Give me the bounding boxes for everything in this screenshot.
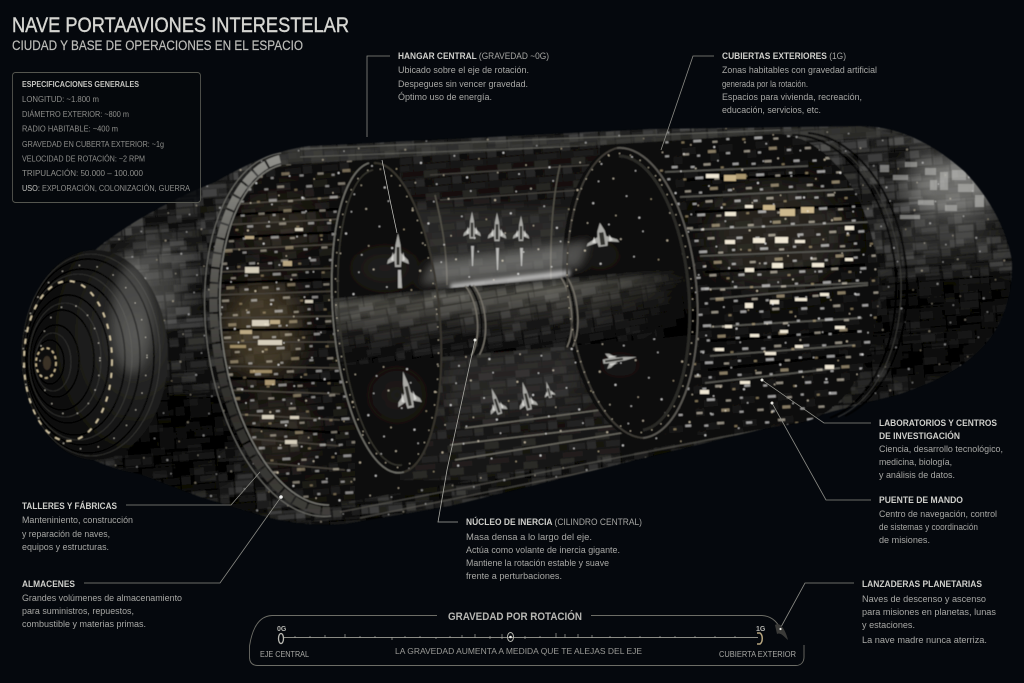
callout: talleres y fabricas: TALLERES Y FÁBRICAS (22, 501, 117, 511)
callout: laboratorios: medicina, biología, (879, 457, 952, 467)
right habitat decks (659, 134, 880, 435)
axis labels: EJE CENTRAL (260, 650, 309, 659)
callout: puente de mando: Centro de navegación, control (879, 509, 997, 519)
callout: hangar central: HANGAR CENTRAL (GRAVEDAD ~0G) (398, 51, 549, 61)
nose hub lights (36, 348, 56, 378)
callout: nucleo de inercia: NÚCLEO DE INERCIA (CILINDRO CENTRAL) (466, 516, 642, 527)
callout: almacenes: ALMACENES (22, 579, 75, 589)
callout: almacenes (22, 495, 283, 629)
callout: hangar central: Óptimo uso de energía. (398, 92, 492, 102)
1G marker (756, 626, 766, 644)
callout: talleres y fabricas (22, 472, 260, 552)
rear end cap rings (792, 133, 907, 418)
lit plates on the rear cap (880, 162, 984, 219)
specifications list: DIÁMETRO EXTERIOR: ~800 m (22, 109, 129, 119)
axis labels (260, 646, 796, 659)
left ring band (213, 159, 330, 511)
specifications list: USO: EXPLORACIÓN, COLONIZACIÓN, GUERRA (22, 183, 190, 193)
panel: general specifications (12, 72, 200, 202)
callout: cubiertas exteriores (661, 51, 877, 150)
callout: talleres y fabricas: equipos y estructuras. (22, 542, 109, 552)
subtitle: CIUDAD Y BASE DE OPERACIONES EN EL ESPACIO (12, 38, 303, 53)
callout: lanzaderas planetarias: Naves de descenso y ascenso (862, 594, 986, 604)
bulkhead ellipse two (562, 148, 698, 438)
callout: nucleo de inercia: frente a perturbaciones. (466, 571, 562, 581)
callout: laboratorios: y análisis de datos. (879, 470, 955, 480)
callout: puente de mando (770, 402, 997, 545)
panel: gravity by rotation (250, 610, 804, 666)
callout: puente de mando: de misiones. (879, 535, 930, 545)
gravity scale line (283, 632, 758, 642)
1G marker: 1G (756, 626, 766, 633)
callout: laboratorios: LABORATORIOS Y CENTROS (879, 418, 997, 428)
callout: lanzaderas planetarias: para misiones en planetas, lunas (862, 607, 996, 617)
nose light ring (24, 281, 112, 441)
interior cutaway (220, 134, 880, 504)
specifications list: RADIO HABITABLE: ~400 m (22, 124, 118, 134)
callout: cubiertas exteriores: generada por la rotación. (722, 79, 808, 89)
callout: cubiertas exteriores: Zonas habitables con gravedad artificial (722, 65, 877, 75)
callout: cubiertas exteriores: educación, servicios, etc. (722, 105, 821, 115)
callout: puente de mando: de sistemas y coordinación (879, 522, 978, 532)
specifications list (22, 95, 190, 193)
axis labels: LA GRAVEDAD AUMENTA A MEDIDA QUE TE ALEJAS DEL EJE (395, 646, 642, 656)
callout: cubiertas exteriores: CUBIERTAS EXTERIORES (1G) (722, 51, 846, 61)
callout: lanzaderas planetarias: LANZADERAS PLANETARIAS (862, 579, 982, 589)
spacecraft cutaway illustration (22, 126, 1012, 524)
icon: planetary shuttle (775, 624, 788, 640)
callout: puente de mando: PUENTE DE MANDO (879, 495, 963, 505)
title: NAVE PORTAAVIONES INTERESTELAR (12, 14, 349, 37)
central inertia core (334, 266, 699, 367)
bulkhead ellipse one (332, 165, 440, 471)
callout: hangar central: Ubicado sobre el eje de rotación. (398, 65, 529, 75)
structural rims (205, 148, 704, 516)
callout: lanzaderas planetarias: La nave madre nunca aterriza. (862, 635, 987, 645)
title (12, 14, 349, 53)
callout: nucleo de inercia: Mantiene la rotación estable y suave (466, 558, 609, 568)
hull shell (94, 126, 1012, 524)
specifications list: LONGITUD: ~1.800 m (22, 95, 99, 104)
callout: hangar central (367, 51, 549, 233)
hangar bay walls (400, 140, 640, 480)
gravity heading: GRAVEDAD POR ROTACIÓN (448, 610, 582, 623)
callout: almacenes: combustible y materias primas. (22, 619, 146, 629)
callout: nucleo de inercia (438, 338, 642, 581)
callout: lanzaderas planetarias: y estaciones. (862, 620, 915, 630)
callout: laboratorios: DE INVESTIGACIÓN (879, 430, 960, 441)
callout: lanzaderas planetarias (781, 579, 996, 645)
callout: cubiertas exteriores: Espacios para vivienda, recreación, (722, 92, 862, 102)
specifications list: VELOCIDAD DE ROTACIÓN: ~2 RPM (22, 154, 145, 164)
callout: almacenes: para suministros, repuestos, (22, 606, 134, 616)
specifications list: TRIPULACIÓN: 50.000 – 100.000 (22, 168, 143, 178)
front nose dome (22, 250, 168, 460)
hangar glow (420, 240, 590, 286)
0G marker: 0G (277, 626, 287, 633)
callout: laboratorios: Ciencia, desarrollo tecnológico, (879, 444, 1003, 454)
docked ships lower row (391, 349, 638, 417)
0G marker (277, 626, 287, 644)
callout: talleres y fabricas: Manteniniento, construcción (22, 515, 133, 525)
axis labels: CUBIERTA EXTERIOR (719, 650, 796, 659)
callout: talleres y fabricas: y reparación de naves, (22, 529, 110, 539)
left habitat decks (220, 160, 356, 504)
callout: laboratorios (760, 378, 1003, 480)
specifications heading: ESPECIFICACIONES GENERALES (22, 79, 139, 89)
docked ships upper row (387, 211, 620, 288)
specifications list: GRAVEDAD EN CUBERTA EXTERIOR: ~1g (22, 140, 164, 149)
callout: nucleo de inercia: Masa densa a lo largo del eje. (466, 532, 592, 542)
callout: hangar central: Despegues sin vencer gravedad. (398, 79, 528, 89)
callout: almacenes: Grandes volúmenes de almacenamiento (22, 593, 182, 603)
callout: nucleo de inercia: Actúa como volante de inercia gigante. (466, 545, 620, 555)
